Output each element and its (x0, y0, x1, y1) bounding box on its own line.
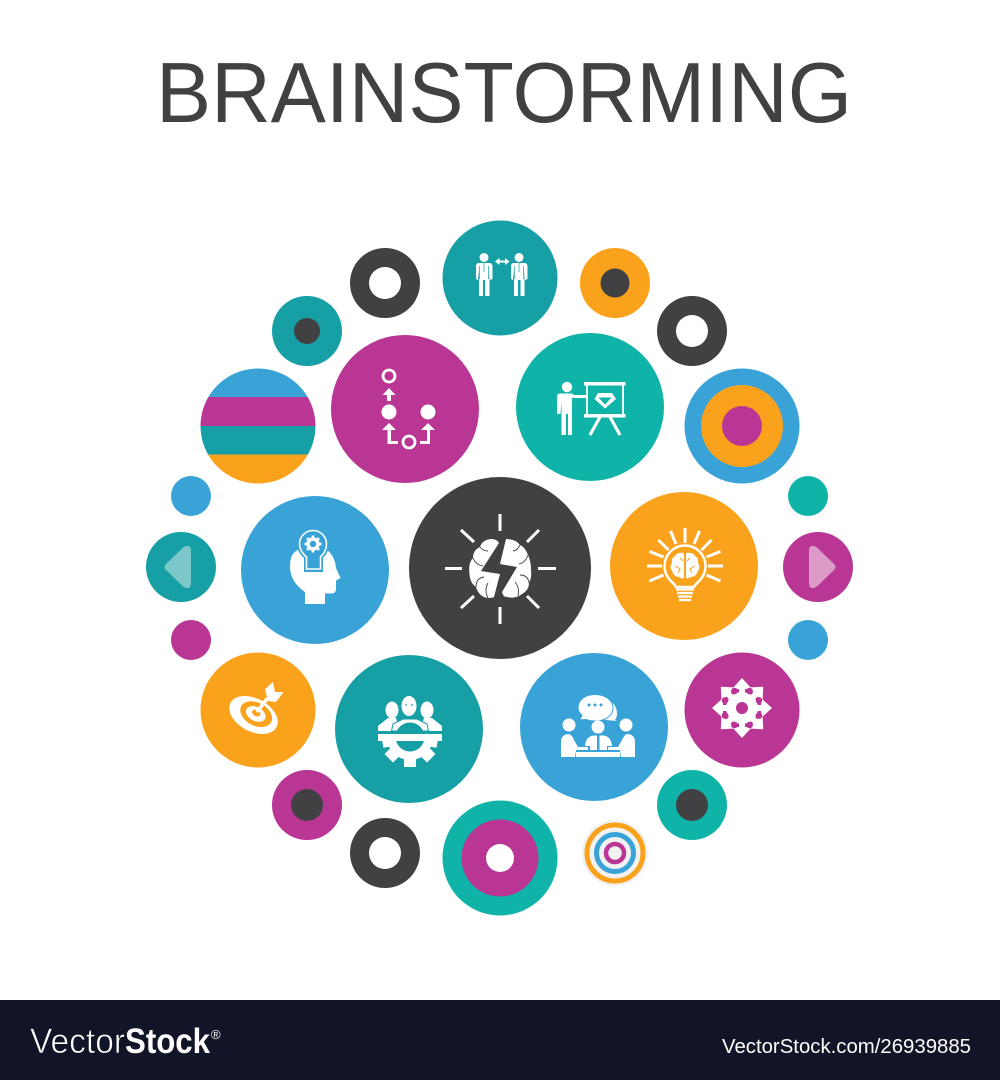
footer image id: VectorStock.com/26939885 (722, 1036, 971, 1058)
icon: light bulb (664, 545, 706, 587)
icon: speech bubbles (578, 694, 617, 721)
footer logo: ® (211, 1027, 221, 1042)
right arrow button (783, 532, 853, 602)
icon: brain rays (445, 514, 556, 624)
node: target with arrow (200, 652, 316, 768)
node: process flow (331, 335, 479, 483)
node: team with gear (335, 655, 483, 803)
node: expanding arrows (684, 652, 800, 768)
title: BRAINSTORMING (156, 46, 852, 141)
center node: brainstorm (409, 477, 591, 659)
decorative ring: bottom left dark (350, 818, 420, 888)
icon: flow steps (382, 370, 436, 448)
icon: meeting people (561, 718, 635, 757)
icon: person right (511, 253, 528, 296)
decorative dot: lower right teal (657, 770, 727, 840)
icon: light rays (647, 528, 723, 581)
icon: bulb base (676, 590, 694, 600)
footer logo: Stock (125, 1022, 210, 1061)
icon: bulb with gear (297, 528, 329, 572)
footer logo (30, 1022, 221, 1061)
node: bulb with brain (610, 492, 758, 640)
icon: target (223, 688, 284, 742)
footer logo: Vector (30, 1022, 125, 1061)
icon: dart (256, 682, 284, 713)
concentric circle: blue orange magenta (684, 368, 800, 484)
decorative ring: top left dark (350, 248, 420, 318)
small dot: teal right (788, 476, 828, 516)
icon: head profile (290, 549, 340, 604)
icon: easel board (584, 382, 626, 435)
node: meeting discussion (520, 653, 668, 801)
left arrow button (146, 532, 216, 602)
small dot: blue left (171, 476, 211, 516)
decorative ring: upper right dark (657, 296, 727, 366)
striped circle (200, 368, 316, 484)
icon: team people (378, 696, 442, 731)
top node: two people (442, 220, 558, 336)
icon: half gear (378, 722, 442, 767)
icon: brain with lightning (469, 539, 531, 598)
icon: arrows in eight directions (712, 678, 772, 738)
node: head with idea gear (241, 496, 389, 644)
small dot: blue right (788, 620, 828, 660)
node: presenter at board (516, 333, 664, 481)
icon: presenter (557, 382, 588, 435)
decorative dot: top right orange (580, 248, 650, 318)
icon: brain in bulb (670, 553, 700, 578)
decorative dot: lower left magenta (272, 770, 342, 840)
footer bar (0, 1000, 1000, 1080)
concentric target rings (582, 820, 648, 886)
concentric circle: bottom teal magenta (442, 800, 558, 916)
icon: person left (476, 253, 492, 296)
decorative dot: upper left teal (272, 296, 342, 366)
small dot: magenta left (171, 620, 211, 660)
icon: double arrow (495, 258, 510, 265)
